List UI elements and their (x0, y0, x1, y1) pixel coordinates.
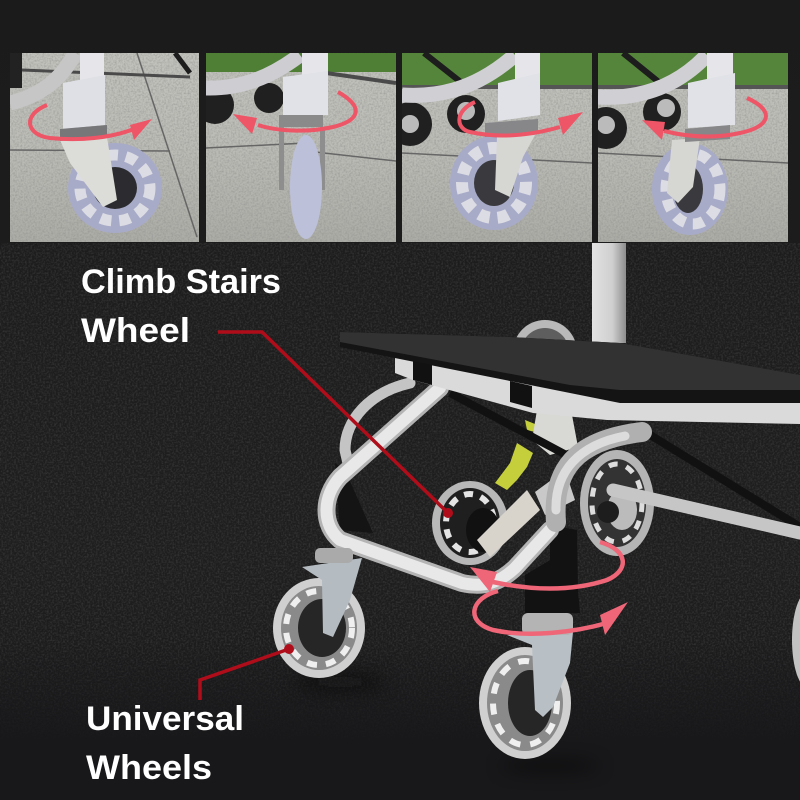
beam under seat (395, 350, 800, 424)
front universal wheel (479, 613, 600, 771)
rotation arrow: upper (470, 542, 623, 592)
cross brace straps (450, 393, 800, 527)
stair climbing wheel: rear right (580, 450, 654, 556)
label: universal wheels: Universal (86, 700, 244, 738)
seat clamps (413, 361, 532, 408)
rear pulley wheel (513, 320, 577, 384)
stair climbing wheel: front (432, 481, 508, 565)
yellow gear (495, 410, 578, 490)
photo 4: caster turned back (598, 53, 788, 242)
leader line: climb stairs wheel (218, 332, 453, 518)
rotation arrow: lower (474, 591, 628, 635)
handle post (592, 243, 626, 343)
leader line: universal wheels (200, 644, 294, 700)
seat platform (340, 332, 800, 403)
photo 3: caster turned left (402, 53, 592, 242)
photo 1: caster turned right (10, 53, 199, 242)
left frame bracket (335, 463, 373, 533)
label: climb stairs wheel: Climb Stairs (81, 263, 281, 301)
left universal wheel (273, 548, 385, 689)
label: climb stairs wheel: Wheel (81, 312, 190, 350)
wheel arm bracket (477, 490, 540, 557)
label: universal wheels: Wheels (86, 749, 212, 787)
partial wheel at right edge (792, 592, 800, 688)
silver chair frame (326, 383, 800, 585)
centre black bracket (525, 525, 580, 613)
photo 2: caster edge-on (206, 53, 396, 242)
